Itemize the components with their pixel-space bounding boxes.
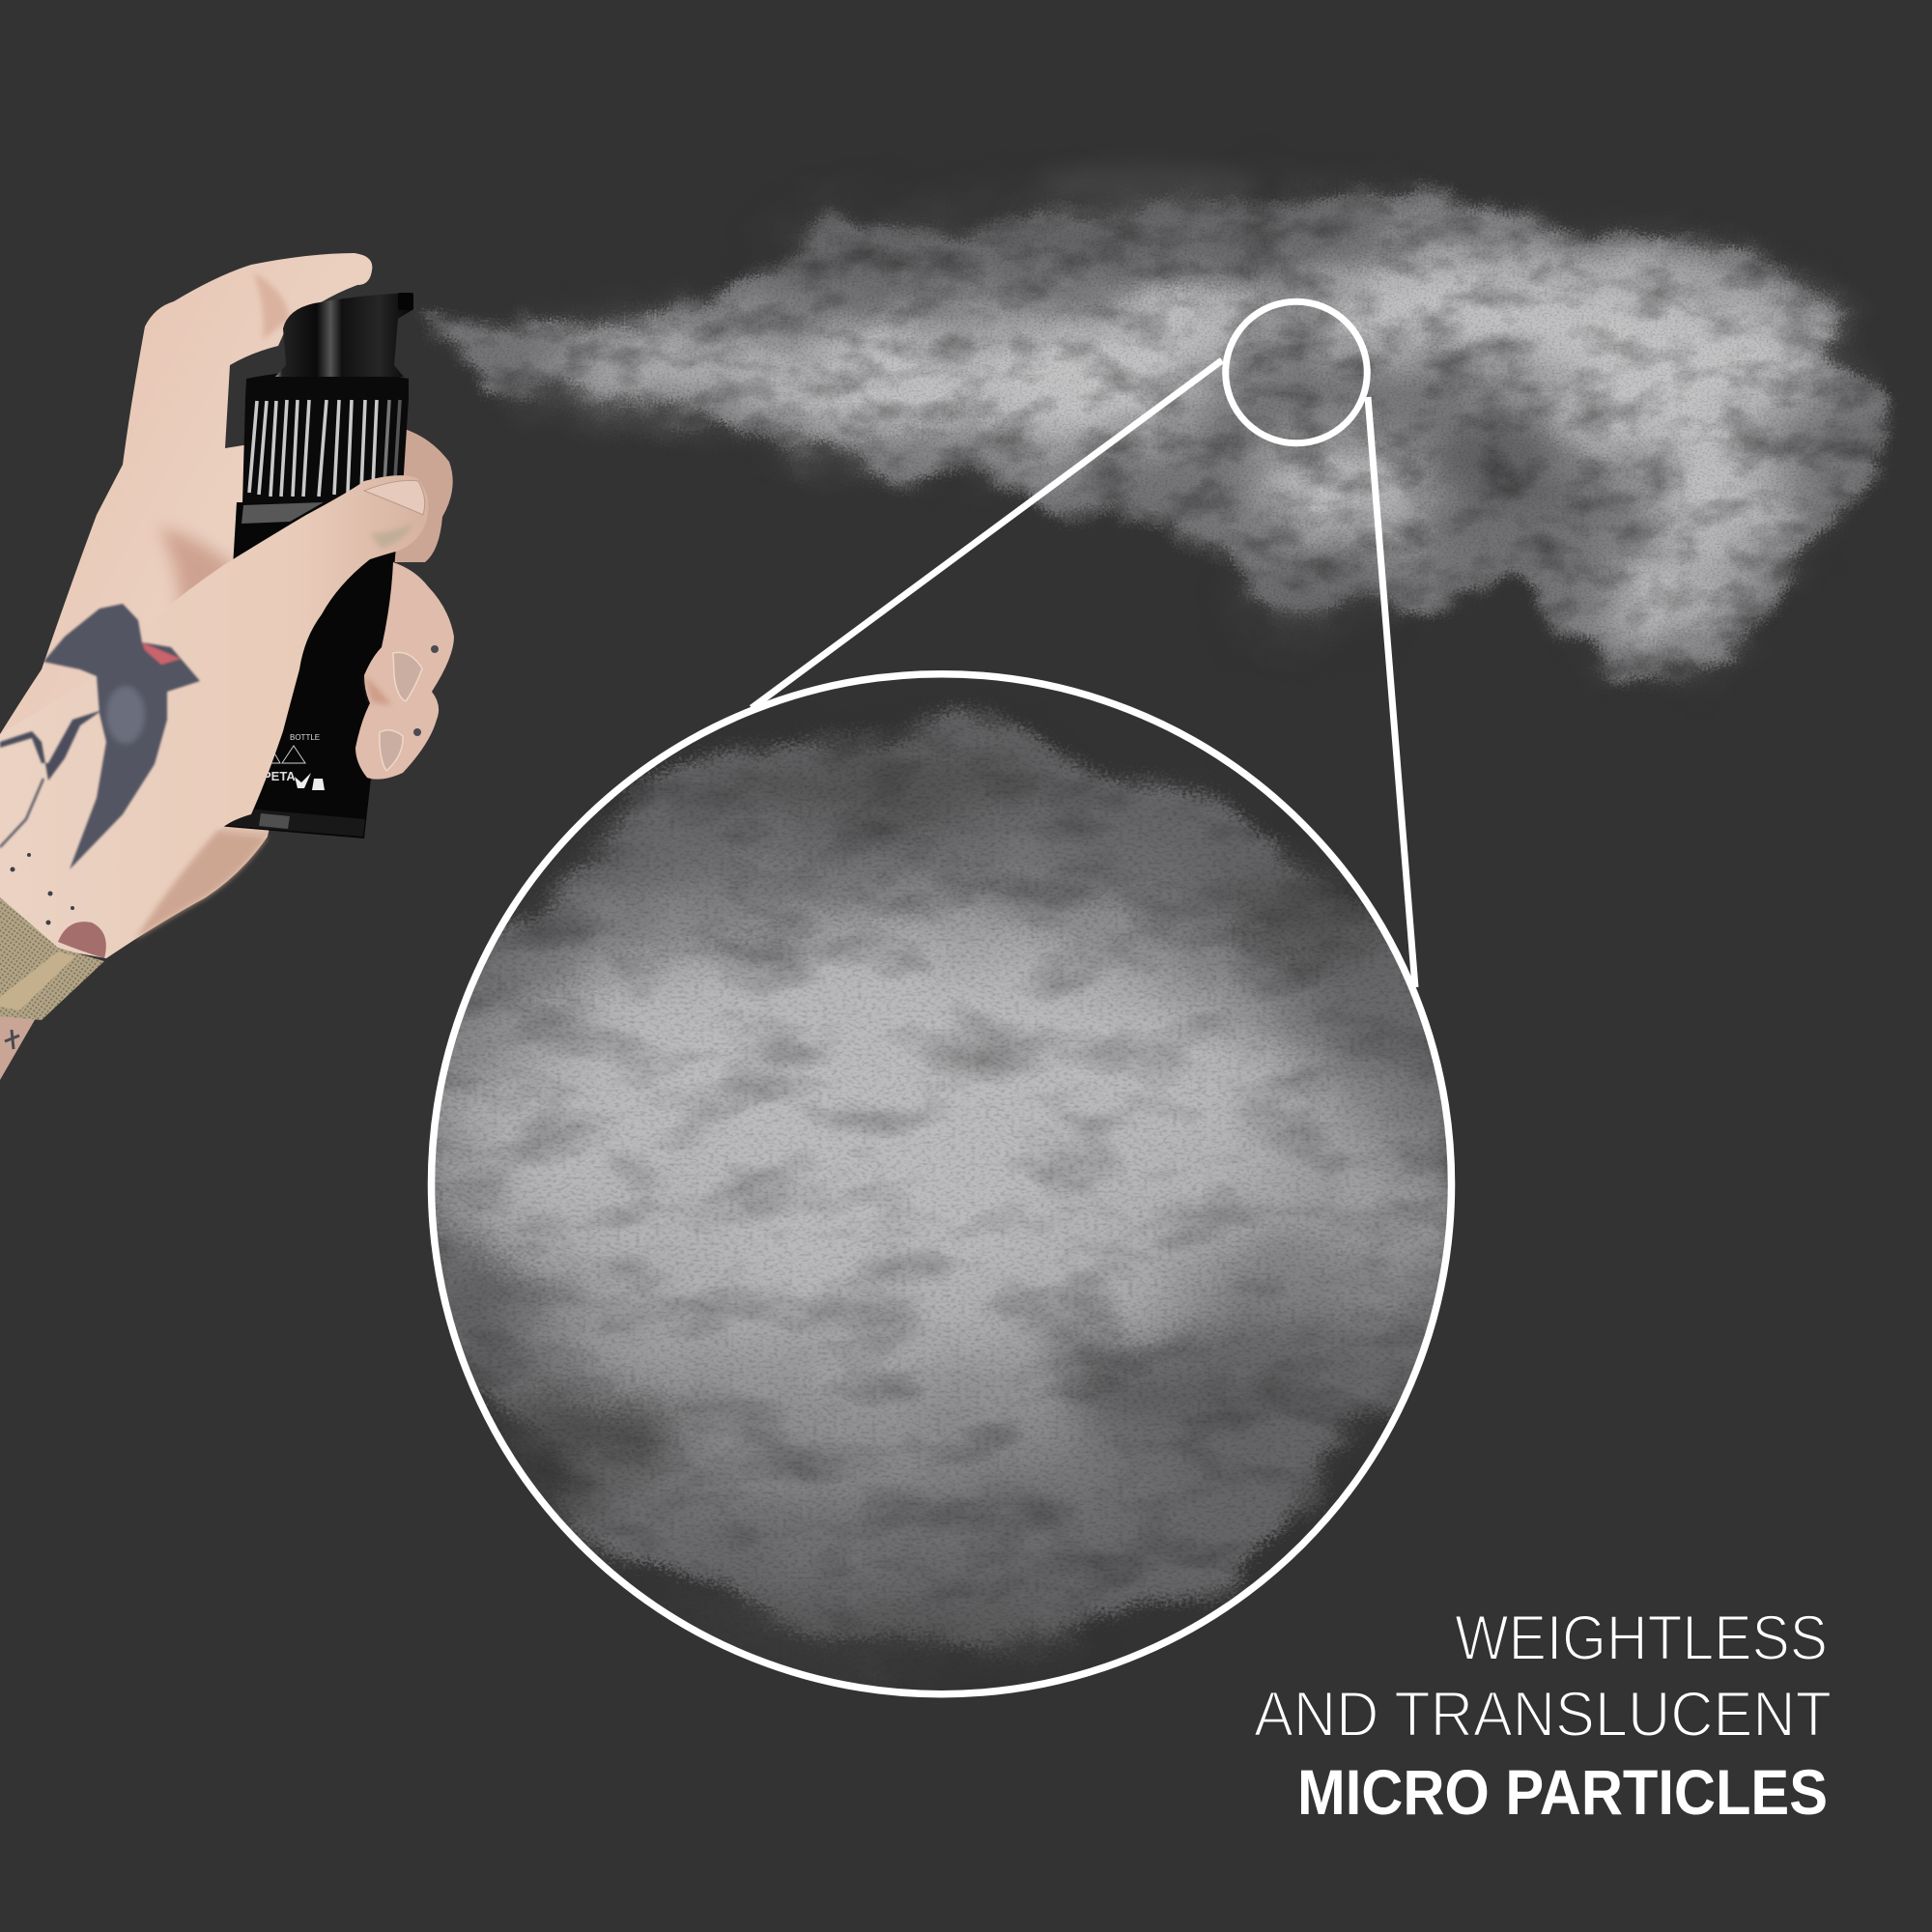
swallow left tail — [0, 710, 102, 781]
thumb nail — [364, 480, 425, 515]
bottle small print: PETA — [263, 769, 296, 783]
magnified spray circle — [435, 698, 1448, 1680]
caption line 3: MICRO PARTICLES — [1297, 1756, 1828, 1828]
bottle small print — [263, 733, 320, 783]
spray haze above cloud — [1035, 162, 1257, 207]
back of the hand — [0, 253, 372, 958]
lower band highlight under ribs — [242, 502, 324, 524]
spray cloud — [419, 197, 1879, 684]
ribbed collar — [242, 371, 409, 503]
lower fingers — [355, 562, 454, 780]
fingernail lower — [380, 730, 403, 771]
swallow thin tail line — [0, 779, 43, 847]
thumb tip shading — [370, 522, 413, 549]
callout circle on spray — [1226, 301, 1367, 443]
bottle body — [217, 502, 400, 838]
caption line 2: AND TRANSLUCENT — [1254, 1678, 1832, 1749]
index finger shading — [253, 272, 290, 340]
bottle base highlight — [220, 807, 365, 837]
wrist tattoo marks — [58, 922, 106, 958]
palm shadow — [159, 526, 237, 618]
swallow highlight — [106, 686, 145, 744]
swallow pink wing — [142, 642, 181, 665]
caption text — [1254, 1602, 1832, 1828]
bottle small print: BOTTLE — [290, 733, 320, 742]
callout line left — [752, 360, 1222, 708]
knuckle tattoo dots — [413, 645, 439, 736]
finger shadow — [365, 676, 391, 705]
forearm below band — [0, 1012, 36, 1080]
caption line 1: WEIGHTLESS — [1455, 1602, 1828, 1673]
thumb and palm over bottle — [0, 475, 429, 958]
swallow wings and body — [43, 604, 200, 869]
middle finger behind bottle — [386, 425, 453, 562]
spray bottle — [217, 293, 413, 838]
icon: hand and spray bottle — [0, 253, 454, 1080]
wrist tattoo dots — [10, 853, 74, 925]
nozzle — [398, 293, 413, 310]
forearm tattoo — [5, 1030, 19, 1049]
swallow tattoo — [0, 604, 200, 869]
callout line right — [1368, 397, 1415, 987]
watch band fold — [0, 952, 75, 1010]
magnified circle outline — [431, 674, 1451, 1694]
palm underside shadow — [135, 831, 268, 939]
pump cap — [275, 293, 413, 377]
metal watch band — [0, 897, 104, 1020]
fingernail upper — [393, 652, 422, 701]
recycling marks — [263, 746, 305, 763]
